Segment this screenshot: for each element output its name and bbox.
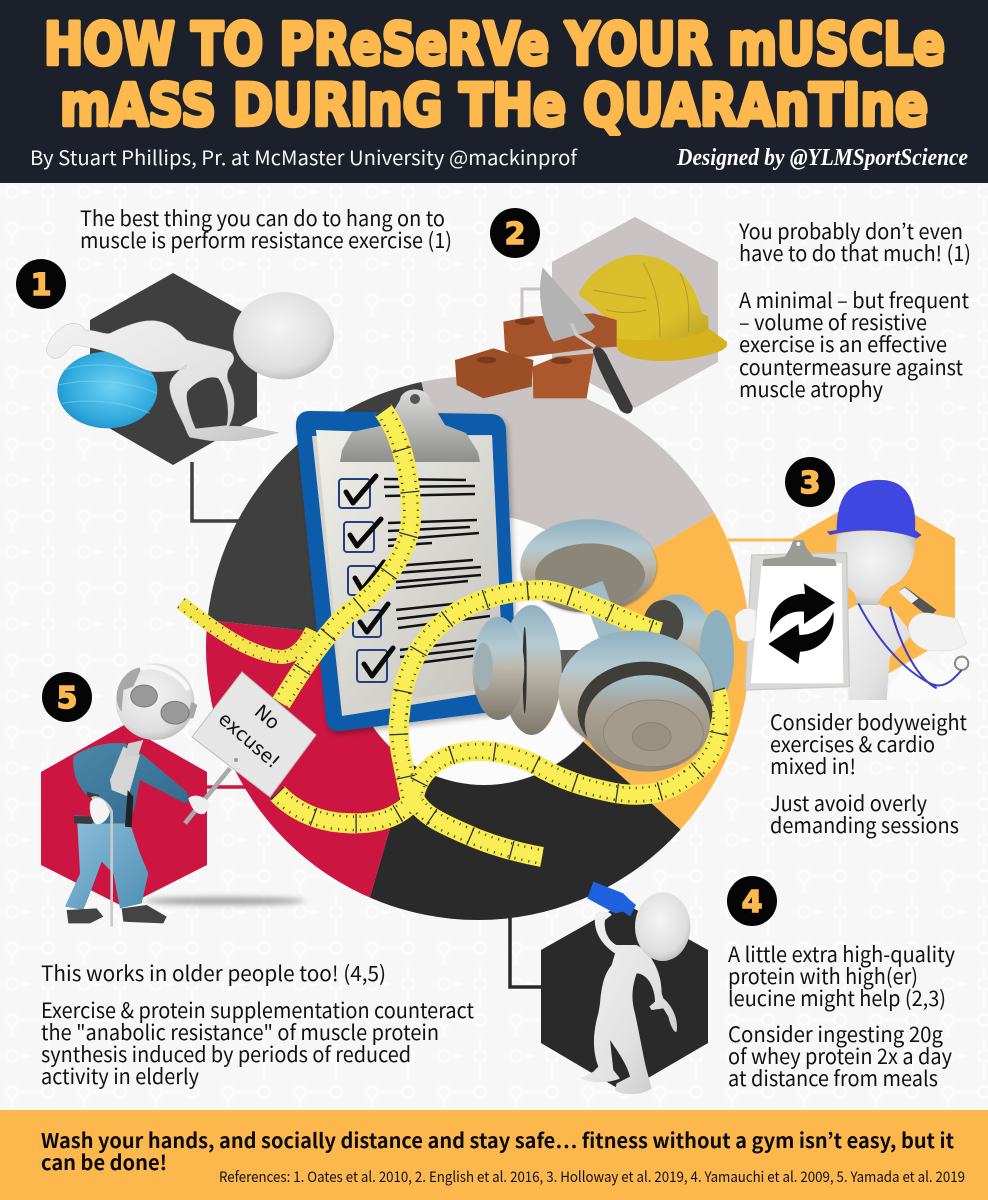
- text: panel 2: A minimal – but frequent: [739, 285, 969, 315]
- icon: clipboard checklist: [296, 390, 517, 731]
- number badge 2: 2: [505, 217, 525, 252]
- text: panel 4: of whey protein 2x a day: [728, 1041, 952, 1071]
- icon: measuring tape: [277, 410, 720, 857]
- text: panel 2: You probably don’t even: [738, 216, 963, 246]
- icon: front dumbbell right plate: [558, 631, 713, 772]
- checkboxes: [339, 479, 387, 682]
- icon: old man with cane: [65, 663, 230, 927]
- text: panel 1: muscle is perform resistance exercise (1): [80, 225, 452, 255]
- hexagon 1: [90, 273, 257, 465]
- number badge 5: [42, 672, 92, 722]
- number badge 5: 5: [57, 681, 77, 716]
- text: panel 5: [41, 958, 474, 1091]
- clip: [340, 390, 480, 462]
- author line: By Stuart Phillips, Pr. at McMaster University @mackinprof: [30, 142, 579, 171]
- closing message: [41, 1124, 954, 1176]
- connector: panel 5: [205, 785, 250, 789]
- text: panel 2: muscle atrophy: [739, 374, 883, 404]
- connector: panel 4: [510, 915, 545, 987]
- text: panel 3: [770, 707, 967, 840]
- number badge 1: [16, 259, 66, 309]
- shadow under old man: [145, 897, 305, 905]
- number badge 2: [490, 208, 540, 258]
- text: panel 2: exercise is an effective: [739, 329, 947, 359]
- connector: panel 3: [728, 538, 800, 542]
- closing message: can be done!: [41, 1146, 167, 1176]
- text: panel 3: demanding sessions: [770, 810, 959, 840]
- text: panel 3: mixed in!: [770, 751, 856, 781]
- icon: no excuse sign: [192, 672, 316, 797]
- central donut chart: [206, 377, 748, 920]
- text: panel 3: Consider bodyweight: [770, 707, 967, 737]
- closing message: Wash your hands, and socially distance and stay safe… fitness without a gym isn’t easy, but it: [41, 1124, 954, 1154]
- icon: rear dumbbell: [520, 519, 734, 700]
- panel 5: older people: [41, 663, 474, 1091]
- icon: coach figure with clipboard and whistle: [735, 480, 970, 700]
- text: panel 5: the "anabolic resistance" of muscle protein: [41, 1017, 439, 1047]
- text: panel 4: [728, 939, 955, 1093]
- text: panel 4: protein with high(er): [728, 961, 918, 991]
- central illustration: clipboard, tape and dumbbells: [181, 390, 734, 857]
- number badge 3: [785, 457, 835, 507]
- text: panel 5: synthesis induced by periods of reduced: [41, 1039, 411, 1069]
- sign text: No: [250, 701, 284, 734]
- text: panel 4: A little extra high-quality: [728, 939, 955, 969]
- text: panel 5: Exercise & protein supplementation counteract: [41, 995, 474, 1025]
- header band: [0, 0, 988, 183]
- icon: front dumbbell left plates: [472, 605, 600, 735]
- text: panel 5: This works in older people too! (4,5): [41, 958, 386, 988]
- text: panel 3: Just avoid overly: [770, 788, 927, 818]
- panel 3: bodyweight and cardio: [735, 457, 970, 840]
- hexagon 2: [552, 217, 718, 408]
- icon: figure on exercise ball: [47, 292, 334, 441]
- connector: panel 2: [522, 289, 553, 320]
- number badge 4: 4: [742, 885, 762, 920]
- text: panel 3: exercises & cardio: [770, 729, 935, 759]
- text: panel 4: at distance from meals: [728, 1063, 938, 1093]
- text: panel 2: have to do that much! (1): [739, 238, 971, 268]
- text: panel 1: The best thing you can do to hang on to: [80, 203, 445, 233]
- hexagon 5: [41, 725, 207, 907]
- tape tail: [181, 603, 312, 657]
- panel 1: resistance exercise: [16, 203, 452, 465]
- number badge 1: 1: [31, 268, 51, 303]
- text: panel 2: countermeasure against: [739, 352, 963, 382]
- check marks: [346, 476, 393, 676]
- bottom band: [0, 1110, 988, 1200]
- text: panel 2: [738, 216, 971, 404]
- icon: bricks, trowel and hard hat: [455, 255, 727, 414]
- sign text: excuse!: [214, 708, 284, 773]
- text: panel 1: [80, 203, 452, 255]
- number badge 4: [727, 876, 777, 926]
- connector: panel 1: [192, 462, 245, 521]
- text: panel 5: activity in elderly: [41, 1061, 199, 1091]
- text: panel 2: – volume of resistive: [739, 307, 927, 337]
- text: panel 4: leucine might help (2,3): [728, 983, 946, 1013]
- icon: figure drinking from bottle: [581, 882, 690, 1094]
- hexagon 4: [541, 903, 708, 1092]
- checklist lines: [384, 479, 490, 665]
- panel 2: minimal volume: [455, 208, 971, 414]
- panel 4: protein: [541, 876, 955, 1094]
- icon: sync arrows: [768, 583, 835, 664]
- hexagon 3: [793, 491, 955, 682]
- title: [44, 10, 945, 139]
- number badge 3: 3: [800, 466, 820, 501]
- text: panel 4: Consider ingesting 20g: [728, 1019, 943, 1049]
